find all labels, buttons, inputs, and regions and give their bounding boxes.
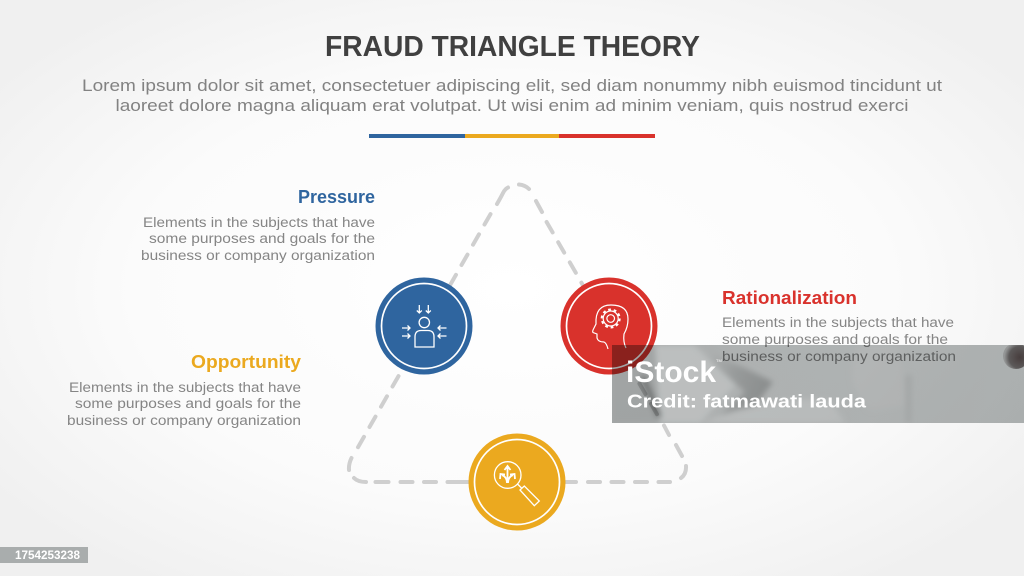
dashed triangle	[349, 184, 686, 482]
rationalization text block	[722, 288, 956, 364]
pressure text block: business or company organization	[141, 248, 375, 263]
pressure text block: Pressure	[298, 187, 375, 207]
stock id tag: 1754253238	[15, 550, 81, 562]
pressure text block: Elements in the subjects that have	[143, 215, 375, 230]
watermark band	[612, 343, 1024, 423]
subtitle text	[82, 76, 942, 115]
opportunity circle icon	[468, 434, 566, 530]
title: FRAUD TRIANGLE THEORY	[325, 31, 700, 63]
tricolor divider	[369, 134, 655, 138]
watermark logo: iStock	[626, 356, 716, 389]
watermark texture	[612, 343, 1024, 423]
watermark trademark: TM	[716, 358, 722, 363]
subtitle text: laoreet dolore magna aliquam erat volutpat. Ut wisi enim ad minim veniam, quis nostrud exerci	[116, 96, 908, 115]
rationalization text block: Elements in the subjects that have	[722, 315, 954, 330]
rationalization text block: some purposes and goals for the	[722, 332, 948, 347]
icon: person with arrows	[402, 305, 446, 347]
rationalization circle icon	[560, 278, 658, 374]
watermark credit: Credit: fatmawati lauda	[627, 392, 867, 412]
opportunity text block: some purposes and goals for the	[75, 396, 301, 411]
opportunity text block: Opportunity	[191, 352, 301, 372]
rationalization text block: Rationalization	[722, 288, 857, 308]
opportunity text block: business or company organization	[67, 413, 301, 428]
subtitle text: Lorem ipsum dolor sit amet, consectetuer adipiscing elit, sed diam nonummy nibh euismod tincidunt ut	[82, 76, 942, 95]
rationalization text block: business or company organization	[722, 349, 956, 364]
pressure circle icon	[376, 278, 472, 374]
stock id tag	[0, 547, 88, 563]
icon: magnifier with arrows	[494, 462, 539, 506]
pressure text block: some purposes and goals for the	[149, 231, 375, 246]
pressure text block	[141, 187, 375, 263]
opportunity text block	[67, 352, 301, 428]
icon: head with gear	[593, 305, 628, 349]
opportunity text block: Elements in the subjects that have	[69, 380, 301, 395]
